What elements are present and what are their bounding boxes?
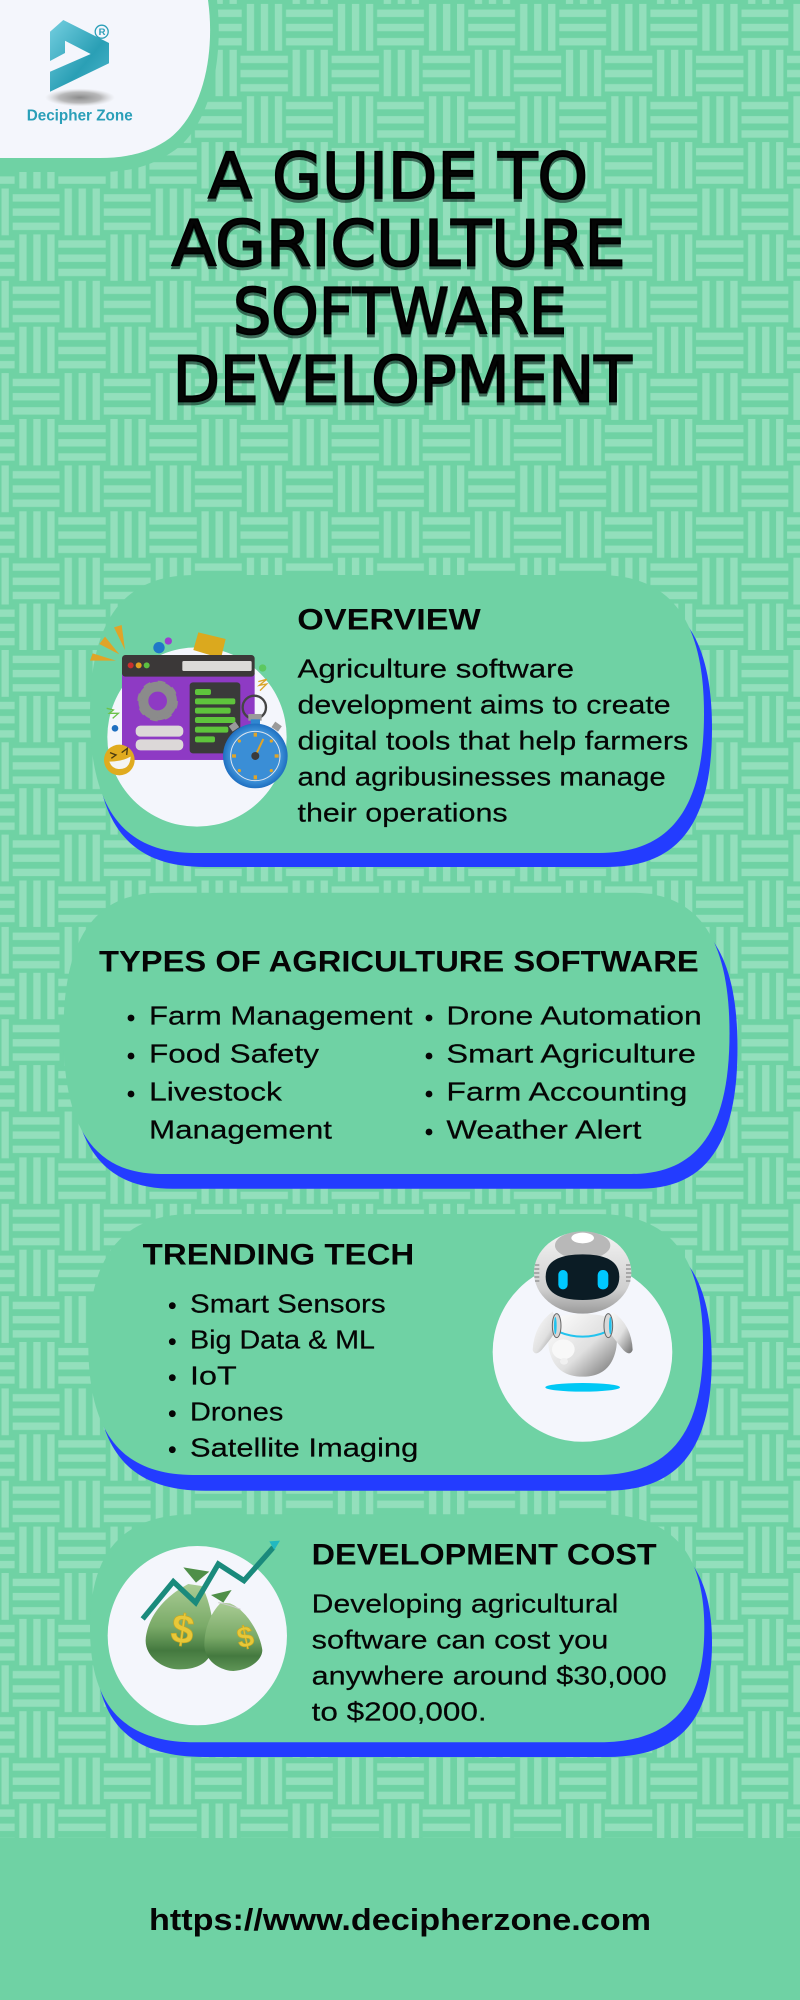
title: A GUIDE TO bbox=[208, 140, 588, 213]
text: overview body: their operations bbox=[298, 797, 508, 827]
title: DEVELOPMENT bbox=[173, 344, 632, 416]
list: software types left column: Farm Management bbox=[149, 1000, 413, 1030]
text: overview body: Agriculture software bbox=[298, 653, 574, 683]
title: AGRICULTURE bbox=[172, 208, 626, 280]
panel: development cost bbox=[90, 1514, 712, 1757]
icon: logo mark: R bbox=[99, 27, 106, 38]
panel: overview bbox=[90, 575, 712, 867]
logo panel bbox=[0, 0, 219, 172]
title: SOFTWARE bbox=[233, 276, 567, 348]
text: cost body: to $200,000. bbox=[312, 1696, 487, 1726]
list: software types left column: Food Safety bbox=[149, 1038, 319, 1068]
list: technologies: Satellite Imaging bbox=[190, 1432, 418, 1462]
icon: software window with stopwatch bbox=[90, 625, 288, 827]
text: overview body: development aims to create bbox=[298, 689, 671, 719]
icon: money bags with rising arrow: $ bbox=[234, 1620, 257, 1655]
list: software types right column: Drone Automation bbox=[446, 1000, 702, 1030]
list: technologies: Big Data & ML bbox=[190, 1324, 375, 1354]
icon: logo mark bbox=[45, 20, 115, 106]
heading: trending tech: TRENDING TECH bbox=[143, 1238, 414, 1271]
text: cost body: software can cost you bbox=[312, 1624, 608, 1654]
text: overview body: digital tools that help farmers bbox=[298, 725, 688, 755]
list: software types left column: Livestock bbox=[149, 1076, 283, 1106]
text: cost body: Developing agricultural bbox=[312, 1588, 618, 1618]
heading: types: TYPES OF AGRICULTURE SOFTWARE bbox=[99, 946, 699, 979]
list: technologies: Drones bbox=[190, 1396, 283, 1426]
text: cost body bbox=[312, 1588, 667, 1726]
footer url: https://www.decipherzone.com bbox=[149, 1902, 651, 1937]
panel: trending tech bbox=[88, 1214, 712, 1491]
panel: types of agriculture software bbox=[63, 893, 737, 1189]
list: software types left column: Management bbox=[149, 1114, 333, 1144]
heading: overview: OVERVIEW bbox=[297, 603, 481, 636]
title bbox=[172, 140, 632, 416]
list: software types left column bbox=[128, 1000, 413, 1144]
list: software types right column: Farm Accounting bbox=[446, 1076, 687, 1106]
list: software types right column bbox=[426, 1000, 702, 1144]
list: technologies bbox=[169, 1288, 418, 1462]
list: software types right column: Smart Agriculture bbox=[446, 1038, 696, 1068]
icon: money bags with rising arrow bbox=[108, 1541, 287, 1725]
text: overview body bbox=[298, 653, 688, 827]
list: technologies: Smart Sensors bbox=[190, 1288, 386, 1318]
icon: robot bbox=[493, 1231, 672, 1442]
heading: development cost: DEVELOPMENT COST bbox=[312, 1538, 657, 1571]
icon: money bags with rising arrow: $ bbox=[168, 1605, 197, 1653]
logo wordmark: Decipher Zone bbox=[27, 108, 133, 125]
text: cost body: anywhere around $30,000 bbox=[312, 1660, 667, 1690]
list: software types right column: Weather Alert bbox=[446, 1114, 642, 1144]
list: technologies: IoT bbox=[190, 1360, 237, 1390]
text: overview body: and agribusinesses manage bbox=[298, 761, 666, 791]
